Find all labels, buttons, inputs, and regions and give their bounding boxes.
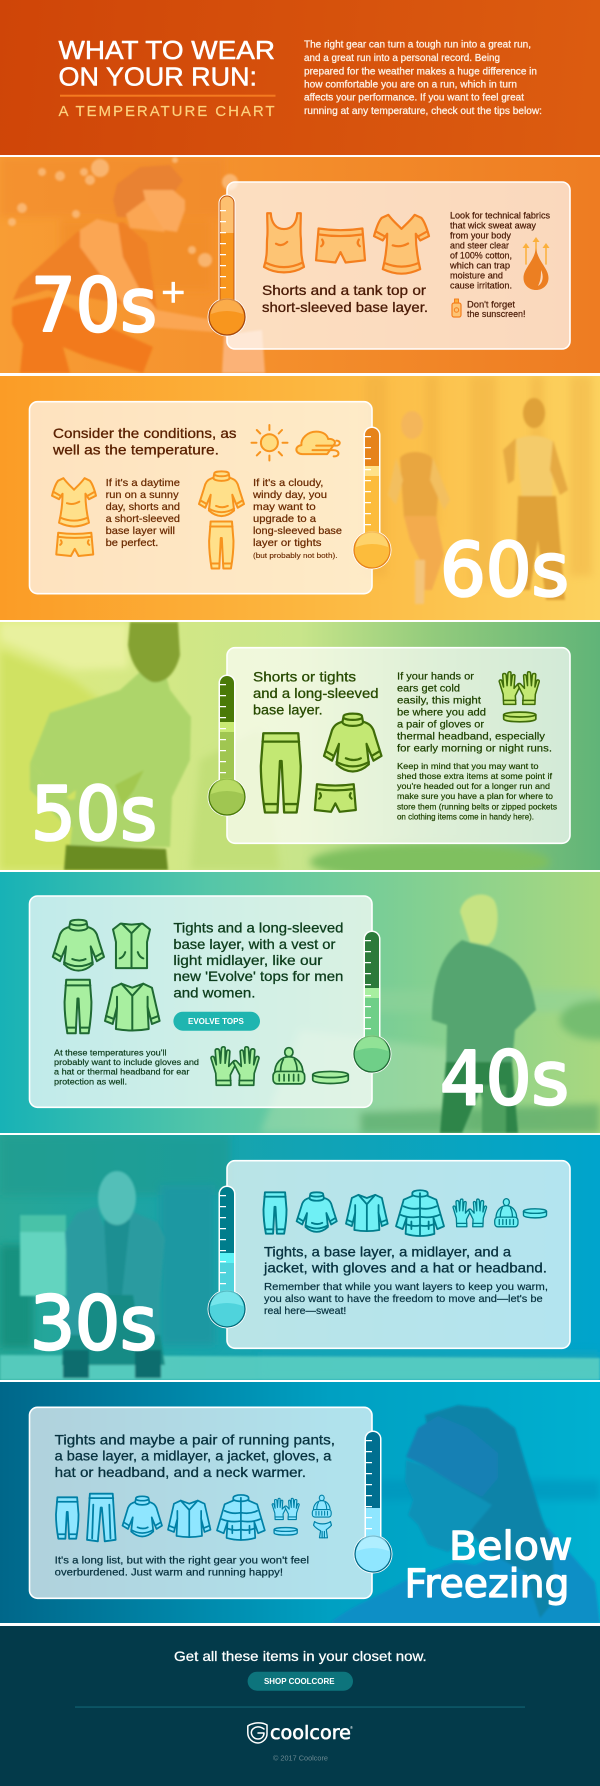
card heading: Tights and a long-sleeved bbox=[173, 920, 343, 936]
icon: cardigan bbox=[168, 1501, 210, 1537]
layering note: you also want to have the freedom to move and—let's be bbox=[264, 1293, 543, 1305]
button: shop coolcore bbox=[248, 1672, 353, 1691]
icon: headband bbox=[313, 1071, 348, 1084]
card: below freezing advice bbox=[30, 1407, 372, 1598]
card heading: and a long-sleeved bbox=[253, 685, 378, 701]
accessories text: protection as well. bbox=[54, 1076, 127, 1086]
cloudy day text: windy day, you bbox=[252, 489, 327, 501]
icon: neck warmer bbox=[314, 1522, 331, 1538]
temperature label: 40s: 40s bbox=[440, 1036, 569, 1122]
intro paragraph: prepared for the weather makes a huge difference in bbox=[304, 66, 537, 77]
sunny day text bbox=[106, 477, 180, 549]
thermometer: 40s bbox=[352, 930, 392, 1074]
card heading: short-sleeved base layer. bbox=[262, 299, 428, 315]
storage tip text bbox=[397, 761, 558, 821]
card heading: new 'Evolve' tops for men bbox=[173, 968, 343, 984]
gloves tip text: If your hands or bbox=[397, 670, 475, 682]
sunscreen note: Don't forget bbox=[467, 300, 516, 310]
intro paragraph: affects your performance. If you want to feel great bbox=[304, 93, 524, 104]
temperature label: Below Freezing bbox=[404, 1524, 572, 1607]
gloves tip text bbox=[397, 670, 552, 754]
icon: long-sleeved top bbox=[53, 920, 104, 971]
card heading: well as the temperature. bbox=[52, 442, 219, 458]
panel: footer bbox=[0, 1626, 600, 1786]
photo: two runners in forest bbox=[388, 377, 592, 605]
button: shop coolcore: SHOP COOLCORE bbox=[264, 1677, 335, 1686]
icon: shorts bbox=[316, 228, 365, 263]
fabric tip text bbox=[449, 210, 550, 291]
icon: tights bbox=[261, 733, 301, 812]
fabric tip text: that wick sweat away bbox=[450, 220, 536, 231]
storage tip text: make sure you have a plan for where to bbox=[397, 791, 553, 801]
icon: tights bbox=[56, 1497, 79, 1539]
intro paragraph: The right gear can turn a tough run into a great run, bbox=[304, 40, 531, 51]
icon: gloves bbox=[272, 1498, 299, 1520]
card heading: base layer, with a vest or bbox=[173, 936, 336, 952]
title bbox=[58, 37, 275, 92]
photo: stretching runner bbox=[0, 157, 265, 373]
temperature label: 70s+: 70s bbox=[31, 263, 157, 349]
layering note: real here—sweat! bbox=[264, 1305, 346, 1317]
sunscreen note bbox=[467, 300, 526, 319]
sunny day text: run on a sunny bbox=[106, 489, 179, 501]
copyright: © 2017 Coolcore bbox=[273, 1754, 328, 1763]
storage tip text: shed those extra items at some point if bbox=[397, 771, 553, 781]
icon: headband bbox=[504, 712, 536, 722]
card heading: and women. bbox=[173, 984, 255, 1000]
cloudy day text: If it's a cloudy, bbox=[253, 477, 323, 489]
button: evolve tops: EVOLVE TOPS bbox=[188, 1017, 244, 1026]
fabric tip text: cause irritation. bbox=[450, 280, 512, 291]
sunny day text: be perfect. bbox=[106, 537, 158, 549]
icon: puffer jacket bbox=[217, 1495, 265, 1540]
icon: tights bbox=[65, 980, 91, 1033]
panel: 40s section bbox=[0, 872, 600, 1133]
intro paragraph bbox=[304, 40, 542, 117]
temperature label: 70s+: + bbox=[161, 268, 186, 315]
fabric tip text: Look for technical fabrics bbox=[450, 210, 550, 221]
temperature label: Below Freezing: Below bbox=[449, 1524, 572, 1570]
card: 40s advice bbox=[30, 896, 372, 1107]
cloudy day text: long-sleeved base bbox=[253, 525, 342, 537]
icon: tights bbox=[209, 522, 233, 568]
card heading: Tights, a base layer, a midlayer, and a bbox=[264, 1244, 511, 1260]
icon: gloves bbox=[453, 1199, 487, 1227]
fabric tip text: from your body bbox=[450, 230, 511, 241]
photo: woman with headband bbox=[330, 1405, 600, 1623]
card heading: Tights and maybe a pair of running pants, bbox=[55, 1431, 335, 1447]
icon: gloves bbox=[499, 672, 539, 704]
intro paragraph: and a great run into a personal record. Being bbox=[304, 53, 500, 64]
photo: man resting under a bridge bbox=[0, 1135, 600, 1380]
icon: cardigan bbox=[105, 984, 160, 1030]
thermometer: 60s bbox=[352, 426, 392, 570]
card: 70s advice bbox=[227, 182, 570, 349]
icon: running pants bbox=[87, 1494, 116, 1541]
closing note: It's a long list, but with the right gear you won't feel bbox=[55, 1554, 309, 1566]
cloudy day text: may want to bbox=[253, 501, 316, 513]
icon: puffer jacket bbox=[396, 1190, 444, 1236]
card: 50s advice bbox=[227, 648, 570, 843]
card heading bbox=[173, 920, 343, 1000]
subtitle: A TEMPERATURE CHART bbox=[58, 103, 274, 120]
gloves tip text: be where you add bbox=[397, 706, 486, 718]
icon: long-sleeved top bbox=[122, 1496, 162, 1536]
card heading bbox=[263, 1244, 547, 1276]
card heading: hat or headband, and a neck warmer. bbox=[55, 1464, 306, 1480]
card heading: light midlayer, like our bbox=[173, 952, 323, 968]
storage tip text: on clothing items come in handy here). bbox=[397, 811, 534, 821]
temperature label: 50s: 50s bbox=[31, 772, 157, 858]
card: 60s advice bbox=[30, 402, 372, 594]
icon: long-sleeved top bbox=[297, 1192, 337, 1232]
sunny day text: If it's a daytime bbox=[106, 477, 180, 489]
intro paragraph: how comfortable you are on a run, which in turn bbox=[304, 80, 517, 91]
icon: tank top bbox=[264, 213, 304, 272]
gloves tip text: for early morning or night runs. bbox=[397, 742, 552, 754]
card heading bbox=[52, 425, 237, 458]
storage tip text: you're headed out for a longer run and bbox=[397, 781, 550, 791]
gloves tip text: ears get cold bbox=[397, 682, 460, 694]
icon: gloves bbox=[211, 1047, 259, 1085]
icon: long-sleeved top bbox=[324, 714, 382, 772]
icon: beanie hat bbox=[273, 1048, 305, 1084]
card heading: Shorts and a tank top or bbox=[262, 282, 426, 298]
icon: headband bbox=[274, 1528, 297, 1535]
panel: 60s section bbox=[0, 376, 600, 620]
panel: header bbox=[0, 0, 600, 155]
title: ON YOUR RUN: bbox=[58, 64, 257, 92]
storage tip text: store them (running belts or zipped pockets bbox=[397, 801, 558, 811]
card heading: Shorts or tights bbox=[253, 669, 356, 685]
layering note bbox=[264, 1281, 548, 1317]
icon: windy cloud bbox=[296, 432, 340, 456]
fabric tip text: of 100% cotton, bbox=[450, 250, 512, 261]
icon: long-sleeved top bbox=[199, 471, 244, 516]
logo: coolcore: ® bbox=[350, 1725, 353, 1730]
panel: 50s section bbox=[0, 622, 600, 880]
cloudy day text: (but probably not both). bbox=[253, 553, 338, 560]
accessories text: probably want to include gloves and bbox=[54, 1057, 199, 1067]
footer call to action: Get all these items in your closet now. bbox=[174, 1648, 427, 1664]
icon: sweat drop with arrows bbox=[522, 237, 550, 290]
sunny day text: base layer will bbox=[106, 525, 175, 537]
icon: headband bbox=[523, 1209, 547, 1218]
photo: woman running by the shore bbox=[260, 894, 600, 1133]
icon: t-shirt bbox=[52, 478, 96, 526]
card heading: Consider the conditions, as bbox=[53, 425, 237, 441]
card heading: jacket, with gloves and a hat or headband. bbox=[263, 1260, 547, 1276]
storage tip text: Keep in mind that you may want to bbox=[397, 761, 539, 771]
sunny day text: day, shorts and bbox=[106, 501, 180, 513]
icon: shorts bbox=[56, 533, 93, 556]
icon: beanie hat bbox=[495, 1199, 518, 1227]
closing note bbox=[55, 1554, 309, 1578]
fabric tip text: which can trap bbox=[449, 260, 510, 271]
layering note: Remember that while you want layers to keep you warm, bbox=[264, 1281, 548, 1293]
gloves tip text: easily, this might bbox=[397, 694, 481, 706]
icon: tights bbox=[263, 1192, 287, 1234]
accessories text bbox=[54, 1047, 199, 1086]
intro paragraph: running at any temperature, check out the tips below: bbox=[304, 106, 542, 117]
icon: shorts bbox=[315, 784, 356, 812]
gloves tip text: thermal headband, especially bbox=[397, 730, 546, 742]
card: 30s advice bbox=[227, 1161, 570, 1348]
icon: beanie hat bbox=[312, 1495, 331, 1517]
temperature label: Below Freezing: Freezing bbox=[404, 1562, 570, 1607]
thermometer: below freezing bbox=[354, 1430, 392, 1574]
fabric tip text: and steer clear bbox=[450, 240, 509, 251]
thermometer: 50s bbox=[208, 674, 246, 816]
icon: vest bbox=[113, 924, 150, 968]
sunscreen note: the sunscreen! bbox=[467, 309, 526, 319]
card heading: a base layer, a midlayer, a jacket, gloves, a bbox=[55, 1448, 332, 1464]
icon: sun bbox=[252, 425, 288, 460]
icon: sunscreen bottle bbox=[452, 299, 461, 317]
cloudy day text: upgrade to a bbox=[253, 513, 316, 525]
logo: coolcore: coolcore bbox=[270, 1722, 351, 1744]
panel: below freezing section bbox=[0, 1382, 600, 1623]
card heading bbox=[55, 1431, 335, 1480]
card heading bbox=[253, 669, 378, 717]
sunny day text: a short-sleeved bbox=[106, 513, 180, 525]
temperature label: 30s: 30s bbox=[30, 1281, 157, 1367]
title: WHAT TO WEAR bbox=[58, 37, 275, 65]
panel: 30s section bbox=[0, 1135, 600, 1380]
icon: cardigan bbox=[346, 1195, 388, 1231]
thermometer: 70s bbox=[208, 194, 246, 336]
photo: man running on a hill bbox=[0, 622, 550, 880]
cloudy day text bbox=[252, 477, 342, 560]
accessories text: a hat or thermal headband for ear bbox=[54, 1067, 190, 1077]
icon: t-shirt bbox=[374, 215, 429, 274]
panel: 70s section bbox=[0, 157, 600, 373]
temperature label: 60s: 60s bbox=[440, 528, 569, 614]
accessories text: At these temperatures you'll bbox=[54, 1047, 167, 1057]
card heading: base layer. bbox=[253, 701, 323, 717]
button: evolve tops bbox=[173, 1012, 260, 1031]
gloves tip text: a pair of gloves or bbox=[397, 718, 485, 730]
thermometer: 30s bbox=[208, 1186, 246, 1328]
card heading bbox=[262, 282, 428, 315]
fabric tip text: moisture and bbox=[450, 270, 503, 281]
cloudy day text: layer or tights bbox=[253, 537, 322, 549]
closing note: overburdened. Just warm and running happy! bbox=[55, 1566, 283, 1578]
